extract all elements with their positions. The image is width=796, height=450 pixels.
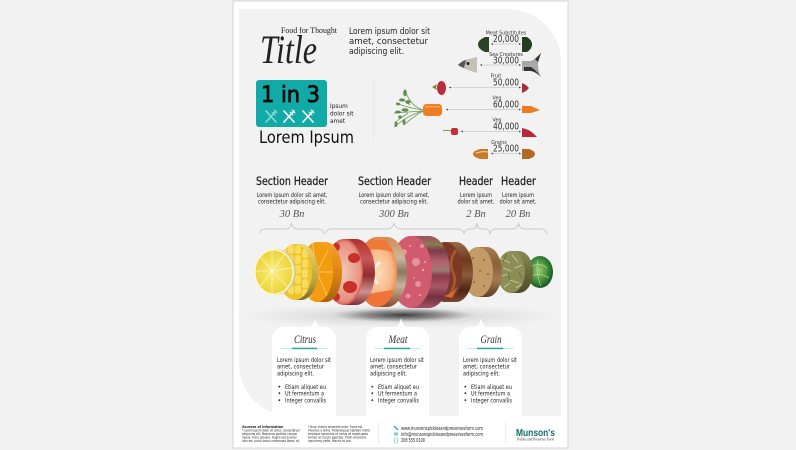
card: meat: amet, consectetur: [370, 364, 417, 371]
page sheet: [233, 1, 568, 448]
section descriptions: dolor sit amet.: [458, 198, 494, 206]
stat card: 1 in 3: 1 in 3: [261, 83, 320, 108]
slice: corn: [284, 244, 318, 300]
card: meat: Etiam aliquet eu: [378, 384, 419, 391]
stat card: 1 in 3: [256, 80, 327, 127]
card: meat: Lorem ipsum dolor sit: [370, 357, 424, 364]
card: meat: •: [370, 384, 374, 391]
card: citrus: [272, 318, 336, 416]
row: sea creatures: 30,000: [493, 56, 519, 66]
row: meat substitutes: 20,000: [493, 34, 519, 45]
card: meat: •: [370, 391, 374, 398]
card: grain: •: [464, 391, 467, 398]
background panel: [239, 9, 561, 416]
section descriptions: Lorem ipsum dolor sit amet,: [358, 192, 430, 199]
intro text: [349, 27, 431, 57]
section values: [279, 209, 530, 220]
footer: notes: Vivamus a tellus. Pellentesque habitant morbi: [308, 428, 370, 432]
slice: salami: [398, 236, 450, 308]
card: grain: Etiam aliquet eu: [471, 384, 512, 391]
icon: web: [394, 426, 398, 430]
intro text: adipiscing elit.: [349, 47, 404, 57]
row: veg, carrot: 60,000: [493, 100, 519, 110]
card: meat: [366, 318, 429, 416]
card: meat: •: [370, 397, 374, 404]
footer: sources: [242, 425, 301, 443]
section values: 300 Bn: [378, 209, 409, 220]
intro text: Lorem ipsum dolor sit: [349, 27, 431, 37]
comparison chart: food quantities: [394, 30, 541, 159]
card: meat: Integer convallis: [378, 397, 419, 404]
row: fruit: [432, 74, 529, 95]
card: grain: Ut fermentum a: [471, 391, 510, 398]
footer: notes: tristique senectus et netus et malesuada: [308, 432, 368, 436]
row: grains: Grains: [491, 140, 507, 146]
footer: contact details: www.munsonspicklesandpreservesfarm.com: [401, 426, 483, 432]
section descriptions: dolor sit amet.: [500, 198, 536, 206]
card: grain: Lorem ipsum dolor sit: [463, 357, 517, 364]
row: sea creatures: Sea Creatures: [489, 52, 523, 58]
card: citrus: adipiscing elit.: [277, 370, 314, 377]
title block: Food for Thought: [281, 26, 338, 35]
card: citrus: Integer convallis: [285, 397, 326, 404]
slice: cabbage: [527, 256, 553, 288]
slice: cracker: [468, 247, 502, 297]
section descriptions: Lorem ipsum: [460, 192, 492, 199]
row: grains: 25,000: [493, 144, 519, 154]
row: grains: [473, 140, 535, 159]
card: grain: [459, 318, 522, 416]
row: veg, carrot: [394, 90, 540, 127]
slice: herb crust: [497, 251, 533, 293]
slice: tomato: [333, 239, 375, 305]
footer: contact details: 208 555 0100: [401, 438, 425, 444]
ground shadow: [235, 304, 565, 328]
sliced food cross-section: [254, 236, 553, 310]
section descriptions: [256, 192, 536, 206]
section descriptions: Lorem ipsum: [502, 192, 534, 199]
icon: crossed utensils, second: [303, 110, 314, 122]
card: citrus: •: [278, 397, 281, 404]
section descriptions: Lorem ipsum dolor sit amet,: [256, 192, 328, 199]
row: meat substitutes: Meat Substitutes: [486, 30, 527, 36]
footer: contact details: [394, 426, 483, 444]
row: fruit: 50,000: [493, 78, 519, 88]
row: veg, radish: 40,000: [493, 122, 519, 132]
card: citrus: Lorem ipsum dolor sit: [277, 357, 331, 364]
section headers: Section Header: [358, 174, 431, 188]
section descriptions: consectetur adipiscing elit.: [258, 198, 326, 206]
card: meat: Meat: [388, 334, 408, 346]
slice: bacon: [428, 242, 473, 302]
brackets: [260, 224, 547, 234]
section headers: Header: [459, 174, 493, 188]
card: citrus: •: [278, 391, 281, 398]
card: grain: amet, consectetur: [463, 364, 510, 371]
icon: crossed utensils, muted: [266, 110, 277, 122]
row: veg, radish: [443, 118, 537, 137]
stat caption: Ipsum: [330, 104, 348, 110]
footer: sources: * Lorem ipsum dolor sit amet, consectetuer: [242, 428, 301, 432]
slice: lemon: [254, 249, 296, 295]
card: citrus: Citrus: [294, 334, 316, 346]
card: citrus: •: [278, 384, 281, 391]
footer: notes: * Nunc viverra imperdiet enim. Fusce est.: [308, 425, 363, 429]
row: veg, radish: Veg: [493, 118, 501, 124]
row: veg, carrot: Veg: [493, 96, 501, 102]
card: citrus: amet, consectetur: [277, 364, 324, 371]
stat caption: amet: [330, 119, 346, 125]
card: grain: •: [464, 397, 467, 404]
icon: phone: [394, 438, 398, 443]
section headers: [256, 174, 536, 188]
logo: Munson's: Munson's: [516, 428, 555, 439]
card: grain: adipiscing elit.: [463, 370, 500, 377]
slice: orange: [308, 242, 342, 302]
footer: sources: adipiscing elit. Maecenas porttitor congue: [242, 432, 297, 436]
footer: sources: massa. Fusce posuere, magna sed pulvinar: [242, 436, 298, 440]
section headers: Section Header: [256, 174, 328, 188]
card: citrus: Ut fermentum a: [285, 391, 324, 398]
card: grain: •: [464, 384, 467, 391]
intro text: amet, consectetur: [349, 37, 429, 47]
row: sea creatures: [458, 52, 541, 77]
stat caption: [330, 104, 354, 125]
icon: carrot top leaves: [394, 90, 423, 127]
section values: 30 Bn: [279, 209, 304, 220]
stat caption: dolor sit: [330, 112, 354, 118]
logo: Munson's: Pickles and Preserves Farm: [516, 436, 554, 442]
footer: contact details: info@munsonspicklesandpreservesfarm.com: [401, 432, 483, 438]
section values: 2 Bn: [466, 209, 486, 220]
slice: salmon: [366, 237, 407, 307]
card: meat: adipiscing elit.: [370, 370, 407, 377]
title block: Title: [260, 27, 317, 72]
footer: notes: fames ac turpis egestas. Proin pharetra: [308, 436, 366, 440]
footer: sources: Sources of Information: [242, 425, 284, 429]
stat heading: Lorem Ipsum: [259, 128, 354, 148]
card: grain: Integer convallis: [471, 397, 512, 404]
icon: email: [394, 432, 398, 436]
section headers: Header: [501, 174, 536, 188]
icon: crossed utensils: [284, 110, 295, 122]
section descriptions: consectetur adipiscing elit.: [360, 198, 428, 206]
footer: notes: nonummy pede. Mauris et orci.: [308, 439, 352, 443]
card: citrus: Etiam aliquet eu: [285, 384, 326, 391]
card: meat: Ut fermentum a: [378, 391, 417, 398]
footer: notes: [308, 425, 370, 443]
footer: sources: ultricies, purus lectus malesuada libero, sit.: [242, 439, 300, 443]
section values: 20 Bn: [506, 209, 530, 220]
card: grain: Grain: [480, 334, 502, 346]
row: fruit: Fruit: [491, 74, 501, 80]
row: meat substitutes: [478, 30, 532, 52]
